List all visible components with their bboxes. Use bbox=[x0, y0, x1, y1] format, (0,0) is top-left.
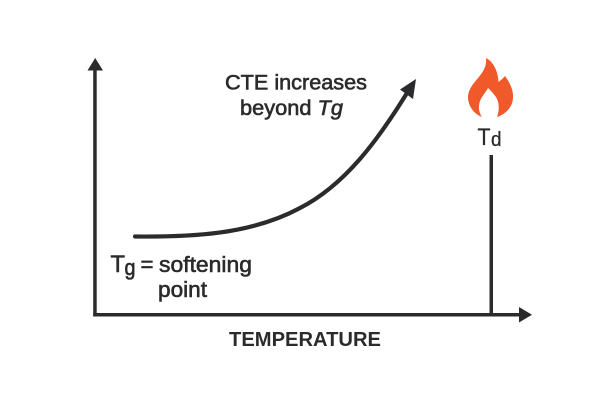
annotation: CTE increases beyond Tg: beyond Tg bbox=[240, 97, 343, 120]
annotation: Tg softening point: softening bbox=[159, 252, 252, 277]
label: Td: d bbox=[491, 129, 502, 151]
annotation: Tg softening point: = bbox=[140, 252, 154, 277]
annotation: Tg softening point: g bbox=[124, 255, 136, 280]
label: Td bbox=[478, 124, 502, 151]
curve: CTE rising beyond Tg bbox=[135, 79, 416, 237]
annotation: Tg softening point: point bbox=[158, 277, 207, 302]
icon: flame bbox=[468, 58, 513, 117]
annotation: CTE increases beyond Tg: CTE increases bbox=[225, 71, 367, 94]
annotation: CTE increases beyond Tg bbox=[225, 71, 367, 120]
x axis label: TEMPERATURE bbox=[229, 329, 381, 351]
annotation: Tg softening point bbox=[110, 251, 252, 302]
annotation: Tg softening point: T bbox=[110, 251, 125, 278]
x axis with arrow bbox=[93, 307, 532, 322]
label: Td: T bbox=[478, 124, 491, 151]
y axis with arrow bbox=[88, 58, 103, 316]
Td vertical line bbox=[490, 155, 493, 314]
